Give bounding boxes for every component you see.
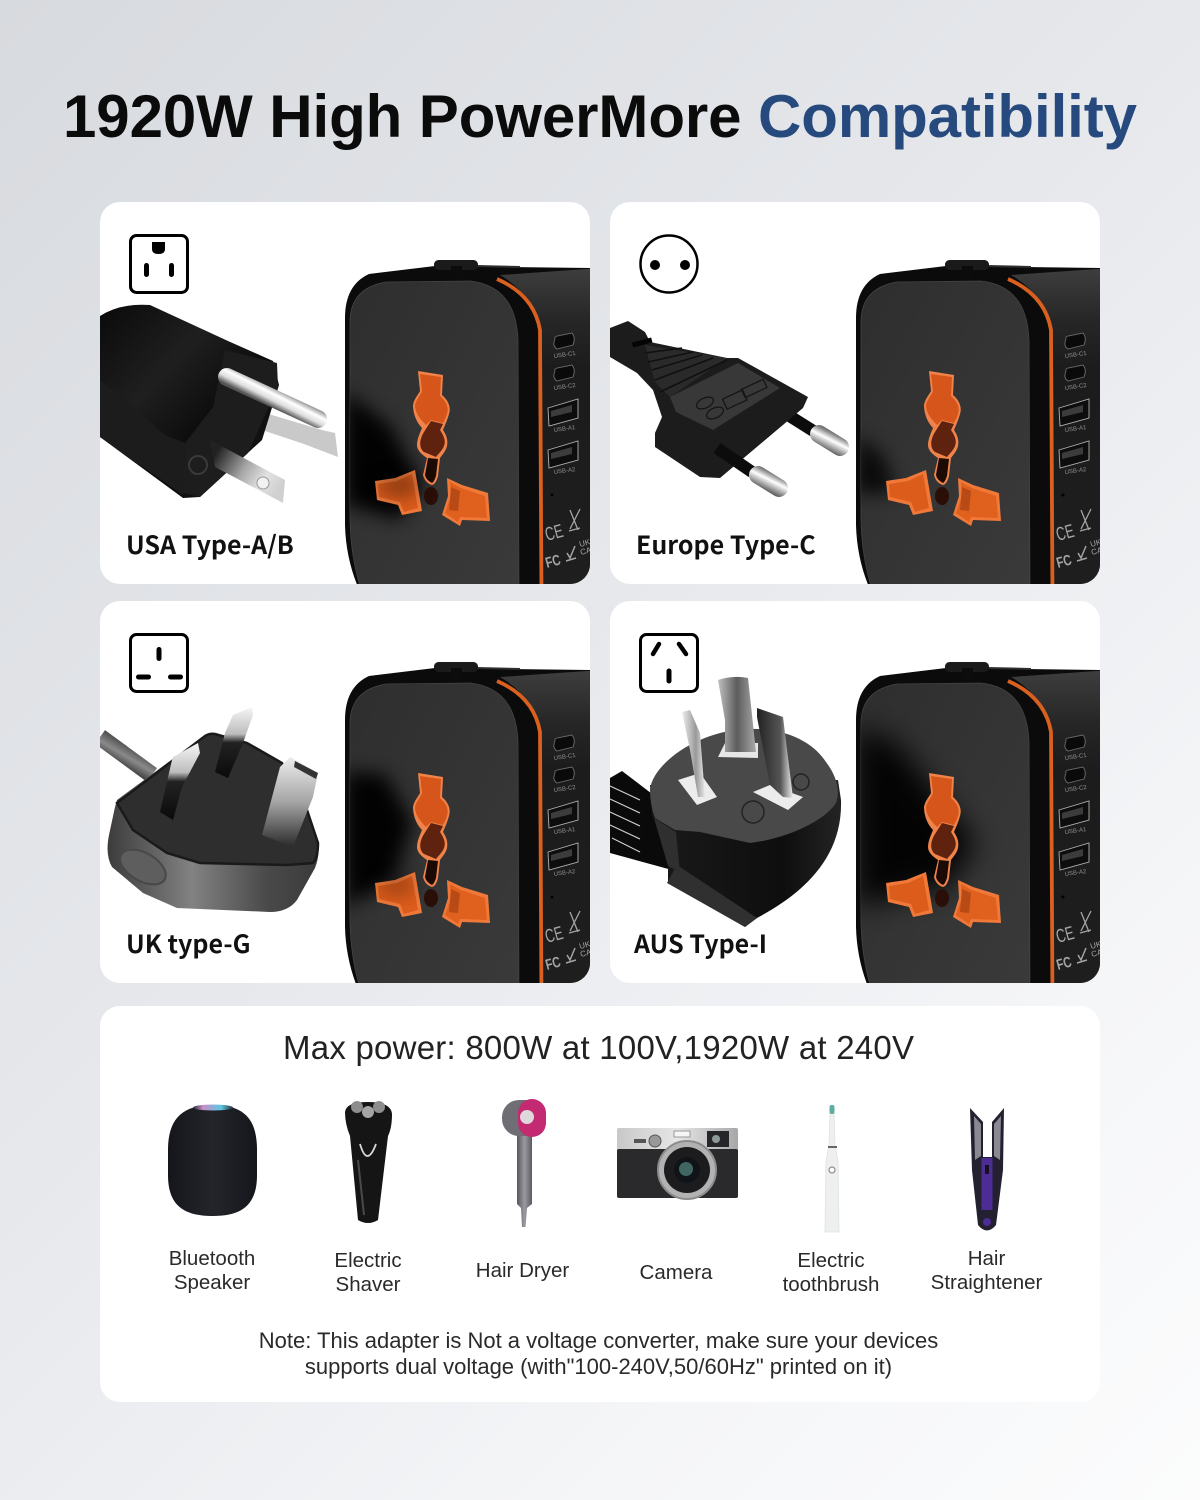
icon: electric toothbrush <box>825 1105 839 1232</box>
label: Europe Type-C: Europe Type-C <box>636 526 816 562</box>
panel: Europe Type-C <box>610 202 1111 600</box>
adapter: UK panel <box>345 662 600 1002</box>
adapter: AUS panel: CA <box>1090 947 1104 959</box>
label: camera: Camera <box>640 1261 713 1284</box>
adapter: Europe panel: CE <box>1054 521 1077 546</box>
note: Note: This adapter is Not a voltage converter, make sure your devices <box>259 1328 938 1353</box>
adapter: AUS panel <box>856 662 1111 1002</box>
adapter: Europe panel: UK <box>1089 537 1103 549</box>
adapter: AUS panel: USB-C2 <box>1064 785 1088 794</box>
panel: AUS Type-I <box>610 601 1111 1002</box>
adapter: USA panel: USB-A2 <box>553 467 576 476</box>
adapter: Europe panel: USB-A2 <box>1064 467 1087 476</box>
adapter: AUS panel: USB-A2 <box>1064 869 1087 878</box>
icon: UK socket <box>130 634 188 692</box>
icon: Europe socket <box>640 236 698 292</box>
label: hair dryer: Hair Dryer <box>476 1259 569 1282</box>
adapter: USA panel: CE <box>543 521 566 546</box>
adapter: USA panel: USB-C2 <box>553 383 577 392</box>
plug: Europe <box>610 321 840 488</box>
plug: UK <box>100 707 319 912</box>
adapter: USA panel: USB-A1 <box>553 425 576 434</box>
adapter: Europe panel: USB-C1 <box>1064 351 1088 360</box>
adapter: UK panel: USB-A2 <box>553 869 576 878</box>
adapter: USA panel: CA <box>579 545 593 557</box>
label: electric shaver: Shaver <box>336 1273 401 1296</box>
plug: AUS <box>610 677 841 927</box>
icon: electric shaver <box>345 1101 392 1223</box>
adapter: UK panel: CE <box>543 923 566 948</box>
adapter: USA panel: UK <box>578 537 592 549</box>
label: electric toothbrush: Electric <box>797 1249 865 1272</box>
label: UK type-G: UK type-G <box>126 925 251 961</box>
icon: hair dryer <box>502 1099 546 1227</box>
label: hair straightener: Hair <box>968 1247 1005 1270</box>
icon: AUS socket <box>640 634 698 692</box>
adapter: Europe panel: CA <box>1090 545 1104 557</box>
adapter: UK panel: FC <box>544 954 563 974</box>
panel: compatible devices <box>100 1006 1100 1402</box>
adapter: UK panel: USB-C2 <box>553 785 577 794</box>
adapter: Europe panel <box>856 260 1111 600</box>
title: 1920W High PowerMore Compatibility <box>63 83 1138 150</box>
label: USA Type-A/B: USA Type-A/B <box>126 526 294 562</box>
label: bluetooth speaker: Speaker <box>174 1271 250 1294</box>
adapter: Europe panel: FC <box>1055 552 1074 572</box>
adapter: AUS panel: USB-C1 <box>1064 753 1088 762</box>
icon: bluetooth speaker <box>168 1104 257 1216</box>
heading: max power: Max power: 800W at 100V,1920W at 240V <box>283 1029 914 1066</box>
adapter: Europe panel: USB-C2 <box>1064 383 1088 392</box>
note: supports dual voltage (with"100-240V,50/60Hz" printed on it) <box>305 1354 892 1379</box>
icon: camera <box>617 1128 738 1199</box>
panel: USA Type-A/B <box>100 202 600 600</box>
label: electric shaver: Electric <box>334 1249 402 1272</box>
adapter: USA panel: USB-C1 <box>553 351 577 360</box>
adapter: UK panel: UK <box>578 939 592 951</box>
adapter: AUS panel: FC <box>1055 954 1074 974</box>
adapter: UK panel: USB-C1 <box>553 753 577 762</box>
adapter: USA panel <box>345 260 600 600</box>
adapter: UK panel: CA <box>579 947 593 959</box>
icon: hair straightener <box>970 1108 1004 1230</box>
label: bluetooth speaker: Bluetooth <box>169 1247 255 1270</box>
label: hair straightener: Straightener <box>931 1271 1043 1294</box>
adapter: UK panel: USB-A1 <box>553 827 576 836</box>
adapter: AUS panel: CE <box>1054 923 1077 948</box>
icon: USA socket <box>130 236 188 292</box>
label: AUS Type-I: AUS Type-I <box>633 925 767 961</box>
panel: UK type-G <box>100 601 600 1002</box>
adapter: Europe panel: USB-A1 <box>1064 425 1087 434</box>
adapter: AUS panel: UK <box>1089 939 1103 951</box>
adapter: USA panel: FC <box>544 552 563 572</box>
label: electric toothbrush: toothbrush <box>783 1273 879 1296</box>
plug: USA <box>100 305 338 503</box>
adapter: AUS panel: USB-A1 <box>1064 827 1087 836</box>
